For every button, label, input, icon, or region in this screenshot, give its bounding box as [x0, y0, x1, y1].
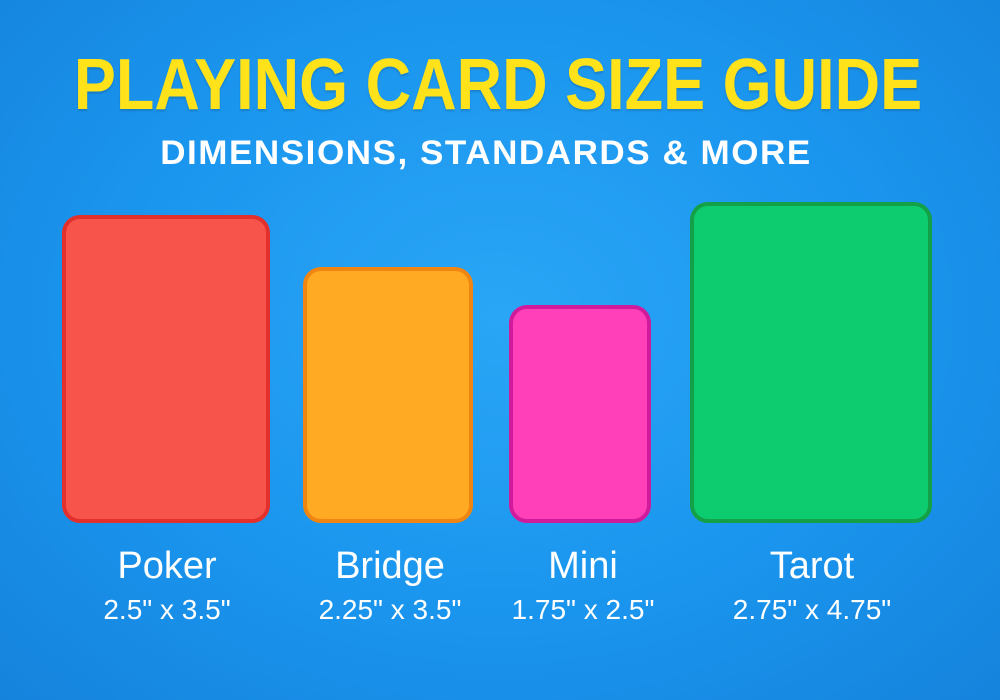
title: PLAYING CARD SIZE GUIDE: [74, 45, 922, 125]
label: mini: Mini: [548, 545, 618, 587]
label: poker: 2.5" x 3.5": [103, 594, 231, 625]
label: tarot: [733, 545, 891, 625]
subtitle: DIMENSIONS, STANDARDS & MORE: [160, 134, 812, 172]
card: poker: [62, 215, 270, 523]
label: tarot: Tarot: [770, 545, 854, 587]
label: poker: Poker: [117, 545, 217, 587]
card: bridge: [303, 267, 473, 523]
label: bridge: 2.25" x 3.5": [319, 594, 461, 625]
label: bridge: Bridge: [335, 545, 445, 587]
card: mini: [509, 305, 651, 523]
card: tarot: [690, 202, 932, 523]
label: poker: [103, 545, 231, 625]
label: tarot: 2.75" x 4.75": [733, 594, 891, 625]
label: mini: 1.75" x 2.5": [512, 594, 654, 625]
label: bridge: [319, 545, 461, 625]
label: mini: [512, 545, 654, 625]
